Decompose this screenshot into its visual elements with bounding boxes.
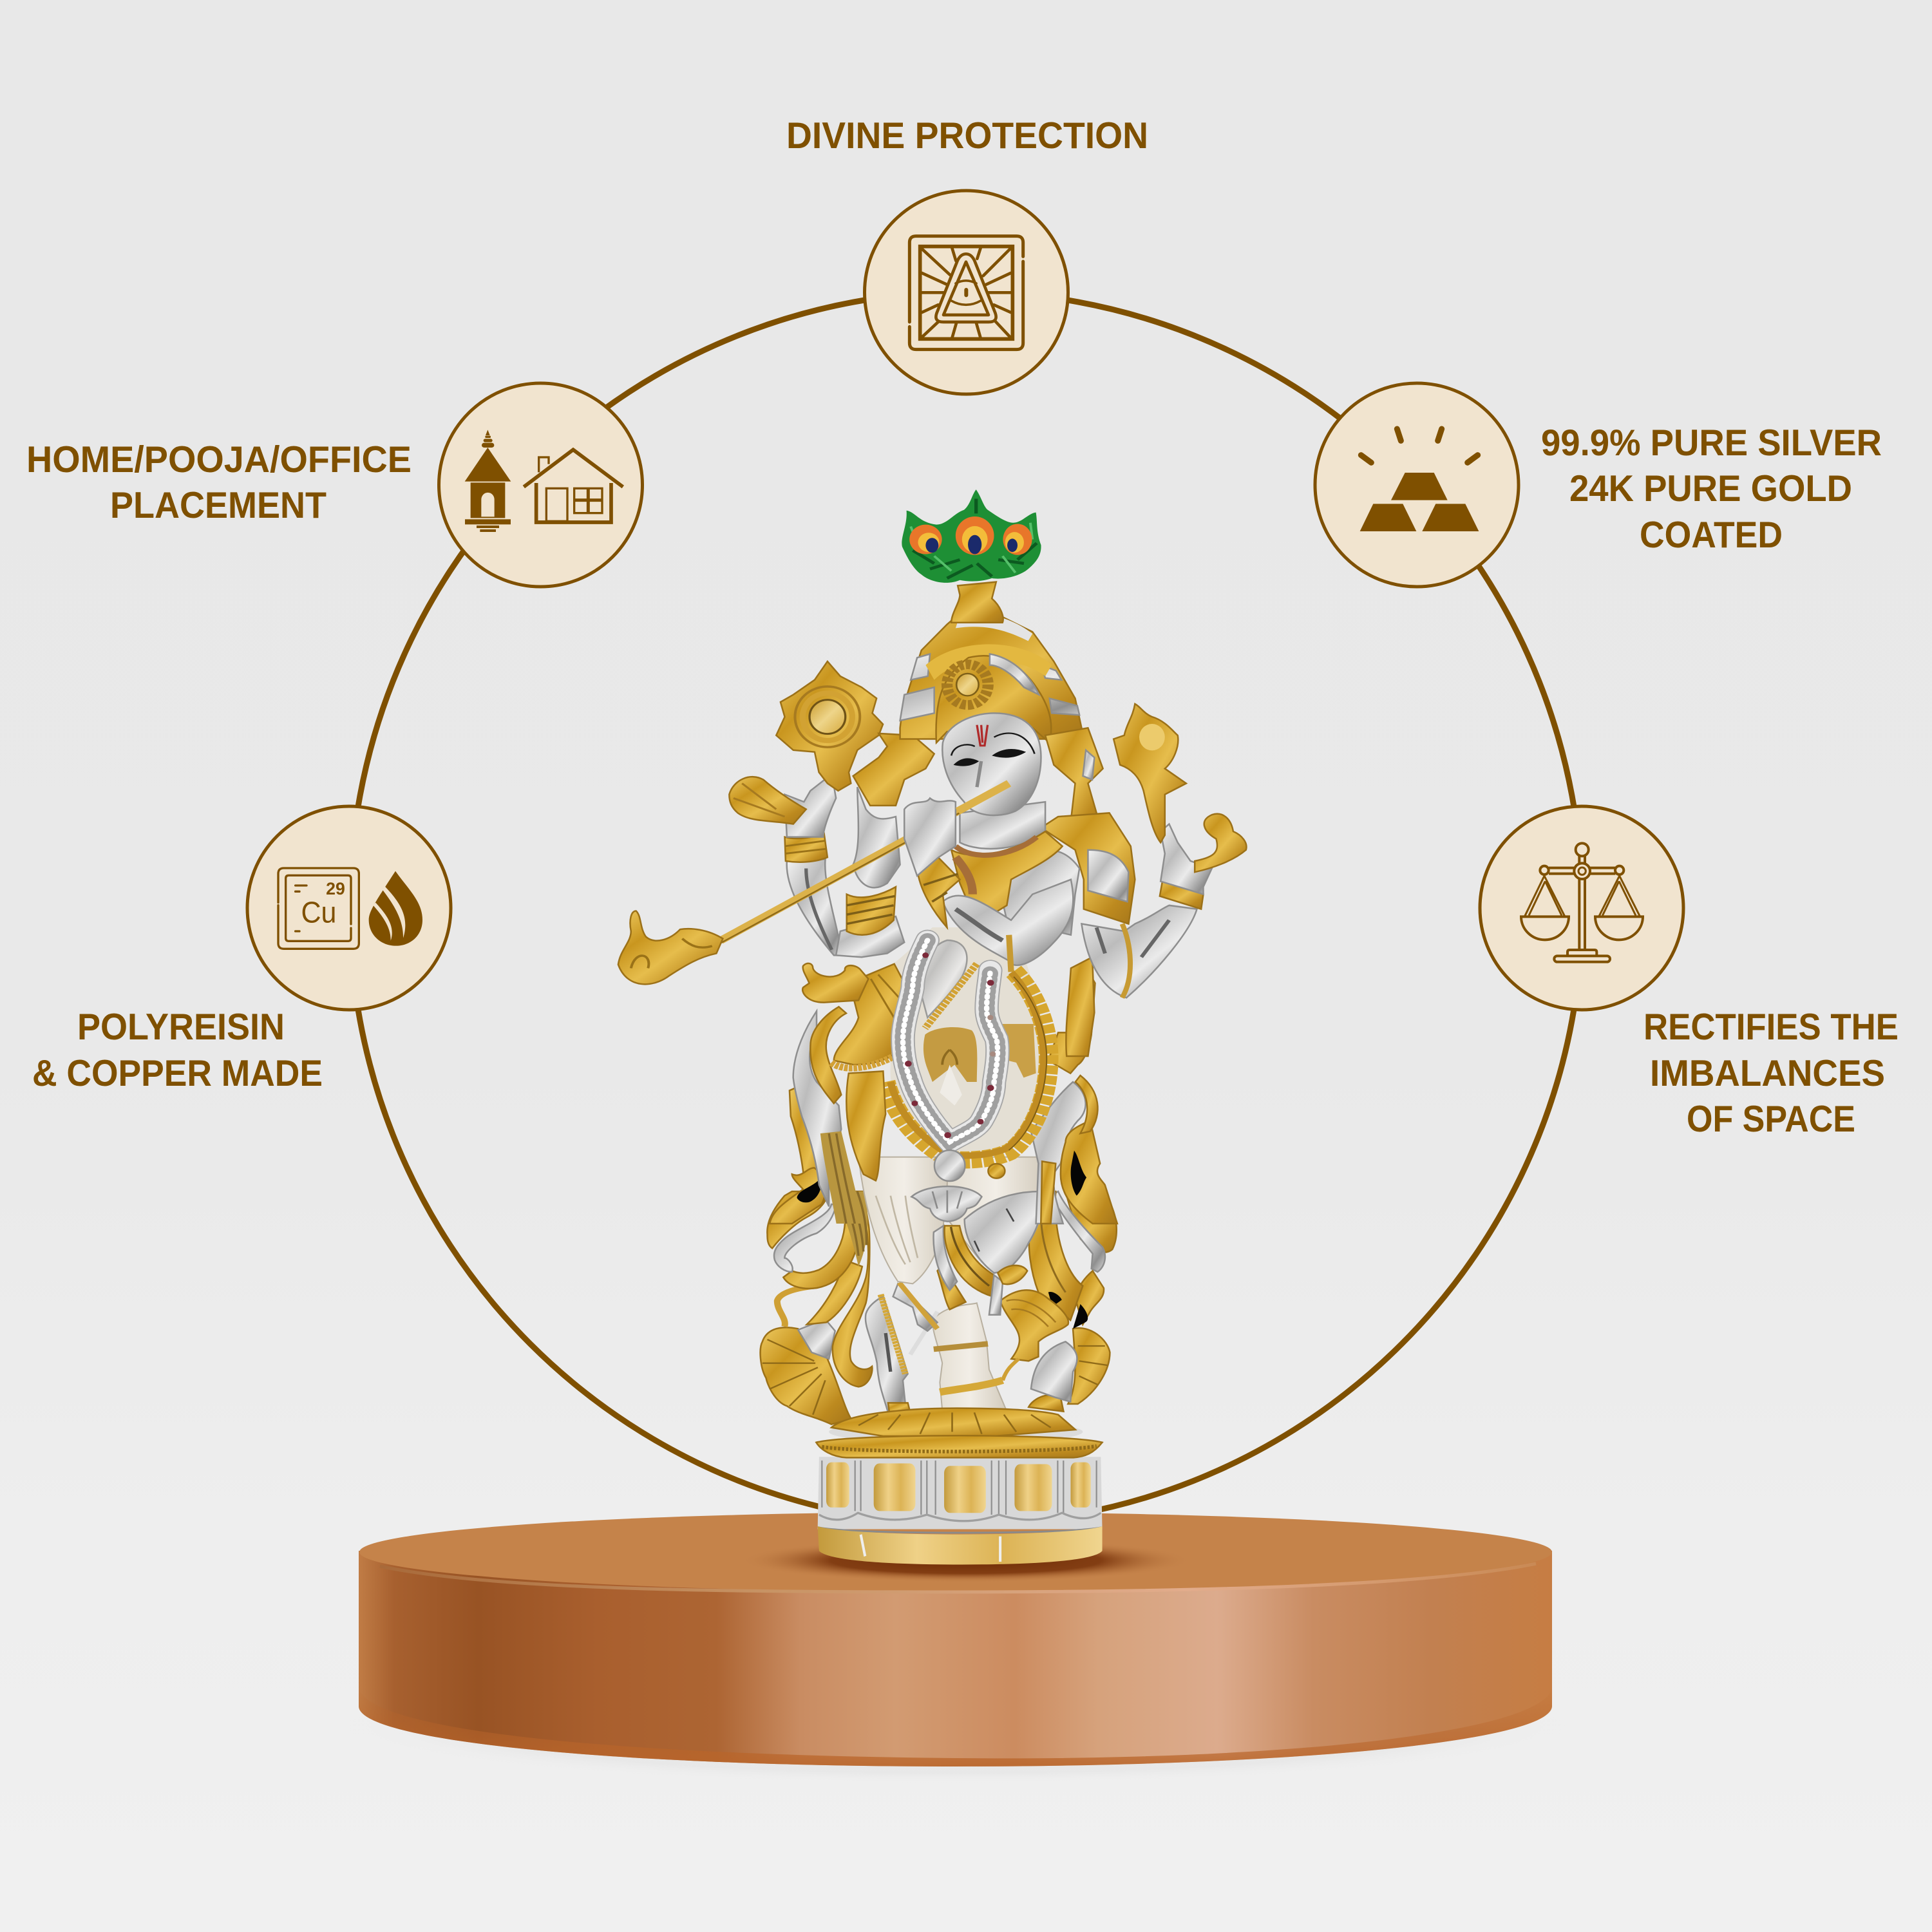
right gold swoosh — [1000, 1290, 1068, 1380]
oval gold aureole — [886, 971, 1048, 1179]
inner left arm — [836, 787, 904, 957]
copper podium — [359, 1512, 1552, 1766]
left side silver and gold drape — [770, 1011, 864, 1224]
round gold and silver base — [816, 1435, 1103, 1564]
icon: house — [524, 450, 623, 522]
upper body, arms, head and crest — [618, 489, 1246, 1056]
torso shoulder cloth — [998, 813, 1135, 935]
heading: material: & COPPER MADE — [32, 1053, 323, 1094]
peacock feather crest — [902, 489, 1041, 583]
left flourish curls — [767, 1191, 862, 1327]
heading: placement: PLACEMENT — [110, 485, 327, 526]
right arm — [1081, 824, 1212, 998]
icon: scales — [1521, 843, 1643, 962]
podium floor shadow — [337, 1667, 1574, 1785]
main ring connecting the feature badges — [350, 292, 1582, 1524]
navel flower and waist gold — [923, 964, 1036, 1106]
heading: purity: 99.9% PURE SILVER — [1541, 422, 1882, 464]
crown outer dome — [900, 613, 1084, 739]
gold necklace — [951, 831, 1063, 924]
badge: balance — [1480, 806, 1683, 1010]
heading: purity: COATED — [1640, 515, 1783, 556]
heading: balance: OF SPACE — [1687, 1099, 1855, 1140]
badge: divine protection — [864, 191, 1068, 394]
right flourish — [1029, 1191, 1117, 1329]
chakra with stem — [776, 661, 883, 791]
neck — [960, 802, 1045, 849]
right hand flower — [1195, 814, 1246, 872]
badge: placement — [439, 383, 643, 587]
heading: balance — [1643, 1007, 1899, 1140]
gold foot band — [818, 1526, 1103, 1564]
face — [942, 713, 1041, 815]
flute at lips — [958, 783, 1009, 811]
right side silver and gold drape — [1031, 966, 1117, 1224]
crest knob — [951, 582, 1003, 623]
icon: copper element tile: 29 — [326, 879, 345, 898]
icon: resin drop — [369, 871, 422, 946]
heading: placement — [26, 439, 412, 526]
dhoti — [858, 1157, 1045, 1315]
badge: material — [247, 806, 451, 1010]
left gold tail drape — [833, 1191, 872, 1387]
icon: gold bars — [1360, 429, 1479, 531]
gold sash and scroll over left hip — [802, 963, 908, 1180]
left fan — [761, 1319, 851, 1425]
garland gems — [905, 952, 996, 1138]
silver belly highlight — [918, 940, 967, 1018]
belly and chest — [888, 927, 1044, 1159]
heading: purity: 24K PURE GOLD — [1569, 468, 1852, 509]
heading: balance: RECTIFIES THE — [1643, 1007, 1899, 1048]
lower body: drapes, fans, dhoti and legs — [761, 1157, 1117, 1425]
mid body: hips, belly, aureole and garland — [770, 927, 1117, 1224]
icon: copper element tile — [278, 868, 359, 949]
right fan — [1068, 1328, 1110, 1404]
conch — [1113, 704, 1186, 842]
heading: material — [32, 1007, 323, 1094]
crown inner tiara — [936, 654, 1051, 743]
heading: placement: HOME/POOJA/OFFICE — [26, 439, 412, 480]
icon: eye of providence in rays — [909, 236, 1023, 350]
crossed forearm — [917, 855, 1073, 972]
heading: balance: IMBALANCES — [1650, 1053, 1885, 1094]
statue contact shadow — [741, 1539, 1191, 1582]
base body — [818, 1457, 1103, 1529]
gold rope rim — [816, 1435, 1103, 1457]
silver flutes — [822, 1461, 1097, 1515]
bent leg — [866, 1283, 938, 1412]
upper left arm — [785, 774, 842, 955]
mace flower — [729, 777, 806, 824]
flute — [618, 783, 1009, 984]
pendant and tassel — [911, 1150, 981, 1222]
gold ornament behind head — [853, 734, 934, 806]
right gold band behind arm — [1066, 957, 1094, 1056]
silver ankle ornament — [1028, 1341, 1077, 1412]
statue: silver and gold flute-playing figure — [618, 489, 1246, 1564]
standing leg — [933, 1303, 1007, 1410]
lotus pad — [829, 1408, 1083, 1444]
heading: material: POLYREISIN — [77, 1007, 285, 1048]
heading: purity — [1541, 422, 1882, 556]
badge: purity — [1315, 383, 1519, 587]
icon: temple — [465, 430, 511, 532]
ear ornament and tassel — [1045, 728, 1103, 828]
beaded silver garland — [903, 940, 998, 1142]
heading: divine protection: DIVINE PROTECTION — [786, 115, 1148, 156]
gold panels — [826, 1463, 1091, 1513]
fingers on flute — [904, 798, 956, 876]
icon: copper element tile: Cu — [301, 896, 336, 929]
